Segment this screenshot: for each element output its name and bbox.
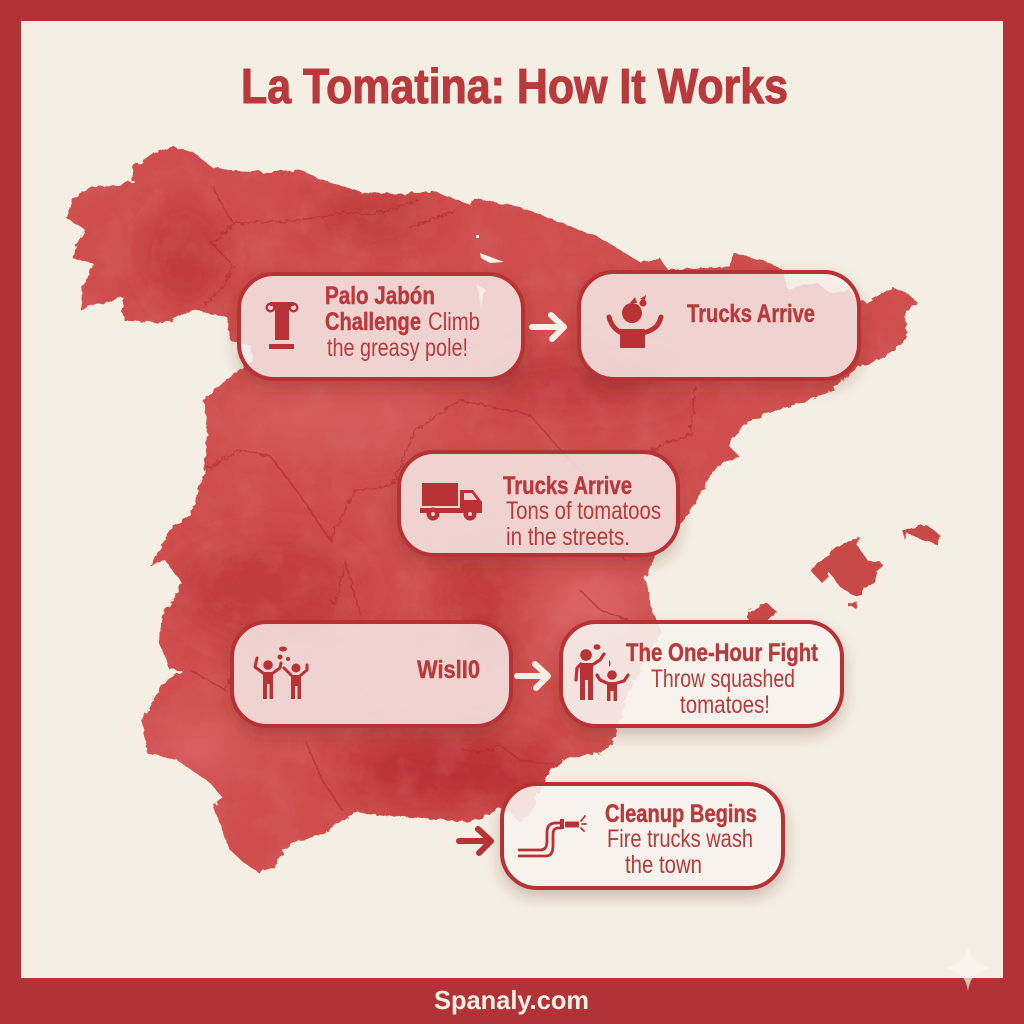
text: The One-Hour Fight: tomatoes!: [680, 691, 770, 719]
text: The One-Hour Fight: Throw squashed: [651, 665, 795, 693]
text: Trucks Arrive details: Tons of tomatoos: [506, 497, 661, 525]
text: Trucks Arrive details: Trucks Arrive: [503, 472, 632, 500]
arrow: into cleanup: [459, 829, 491, 853]
text: Cleanup Begins: Fire trucks wash: [607, 825, 753, 853]
text: The One-Hour Fight: The One-Hour Fight: [626, 639, 819, 667]
text: Wisll0: WislI0: [417, 656, 480, 684]
card: The One-Hour Fight: [561, 622, 842, 726]
text: Cleanup Begins: Cleanup Begins: [605, 800, 757, 828]
card: Wisll0: [232, 622, 511, 726]
card: Trucks Arrive: [399, 452, 678, 555]
island: Menorca: [902, 525, 940, 545]
white paper flecks in the wash: [476, 235, 734, 468]
icon: sparkle: [944, 945, 992, 991]
text: Trucks Arrive: Trucks Arrive: [687, 300, 815, 328]
text: The One-Hour Fight: [626, 639, 819, 719]
paper fleck inside card: [476, 284, 486, 310]
icon: two people and tomatoes: [255, 646, 307, 699]
region borders: [190, 187, 695, 810]
text: Palo Jabón Challenge: Palo Jabón: [325, 282, 435, 310]
island: Cabrera: [848, 602, 858, 608]
title: La Tomatina: How It Works: [241, 60, 788, 114]
footer: site name: Spanaly.com: [434, 985, 589, 1015]
island: Mallorca: [810, 537, 882, 597]
text: Palo Jabón Challenge: Climb: [428, 308, 480, 336]
icon: fire hose: [518, 816, 586, 856]
text: Palo Jabón Challenge: Challenge: [325, 308, 421, 336]
arrow: step 4 to step 5: [517, 664, 548, 688]
watercolor map of Spain: [60, 140, 940, 880]
icon: adult and child throwing tomatoes: [576, 644, 628, 701]
arrow: step 1 to step 2: [532, 315, 564, 339]
island: Ibiza: [748, 603, 777, 624]
card: Cleanup Begins: [502, 784, 783, 888]
text: Cleanup Begins: [605, 800, 757, 879]
text: Trucks Arrive details: [503, 472, 661, 551]
icon: truck: [420, 483, 482, 520]
text: Palo Jabón Challenge: the greasy pole!: [327, 334, 468, 362]
text: Trucks Arrive details: in the streets.: [506, 523, 630, 551]
icon: person holding tomato: [609, 295, 661, 348]
text: Palo Jabón Challenge: [325, 282, 480, 362]
card: Trucks Arrive heading only: [579, 272, 859, 379]
card: Palo Jabón Challenge: [239, 274, 523, 379]
text: Cleanup Begins: the town: [625, 851, 702, 879]
icon: greasy pole column: [267, 302, 297, 349]
